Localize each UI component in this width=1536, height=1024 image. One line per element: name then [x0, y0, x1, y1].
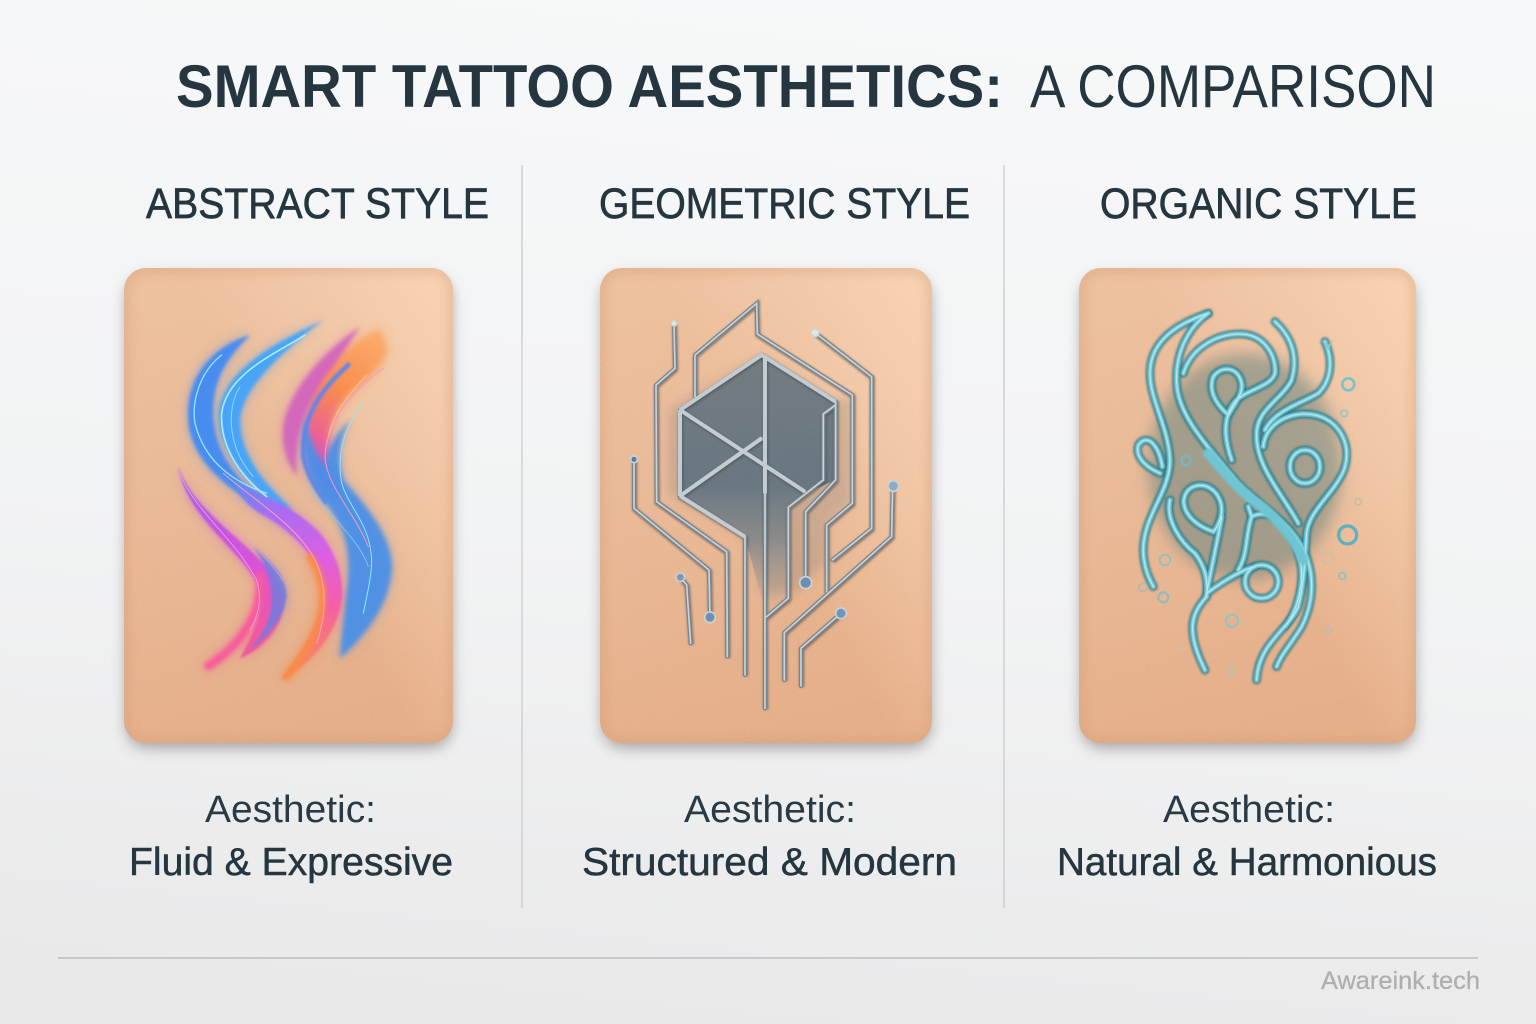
heading: abstract style: ABSTRACT STYLE — [146, 180, 489, 228]
abstract fluid strokes — [178, 320, 392, 681]
circuit tattoo — [631, 303, 899, 710]
caption: organic: Aesthetic: — [1163, 789, 1335, 831]
panel: organic style — [1057, 180, 1437, 884]
title: SMART TATTOO AESTHETICS: — [176, 53, 1003, 120]
caption: geometric — [582, 789, 957, 884]
heading: organic style: ORGANIC STYLE — [1100, 180, 1417, 228]
caption: organic — [1057, 789, 1437, 884]
footer brand: Awareink.tech — [1321, 967, 1480, 995]
bubbles — [1139, 378, 1362, 674]
heading: geometric style: GEOMETRIC STYLE — [599, 180, 970, 228]
skin patch with geometric tattoo — [600, 268, 932, 748]
circuit nodes — [631, 321, 899, 623]
organic vine tattoo — [1138, 313, 1362, 680]
skin patch with organic tattoo — [1079, 268, 1416, 748]
caption: geometric: Structured & Modern — [582, 841, 957, 884]
title: A COMPARISON — [1030, 53, 1436, 120]
caption: abstract — [129, 789, 453, 884]
panel: geometric style — [582, 180, 970, 884]
caption: abstract: Fluid & Expressive — [129, 841, 453, 884]
caption: geometric: Aesthetic: — [684, 789, 856, 831]
panel: abstract style — [124, 180, 489, 884]
skin patch with abstract tattoo — [124, 268, 453, 748]
caption: organic: Natural & Harmonious — [1057, 841, 1437, 884]
caption: abstract: Aesthetic: — [205, 789, 376, 831]
